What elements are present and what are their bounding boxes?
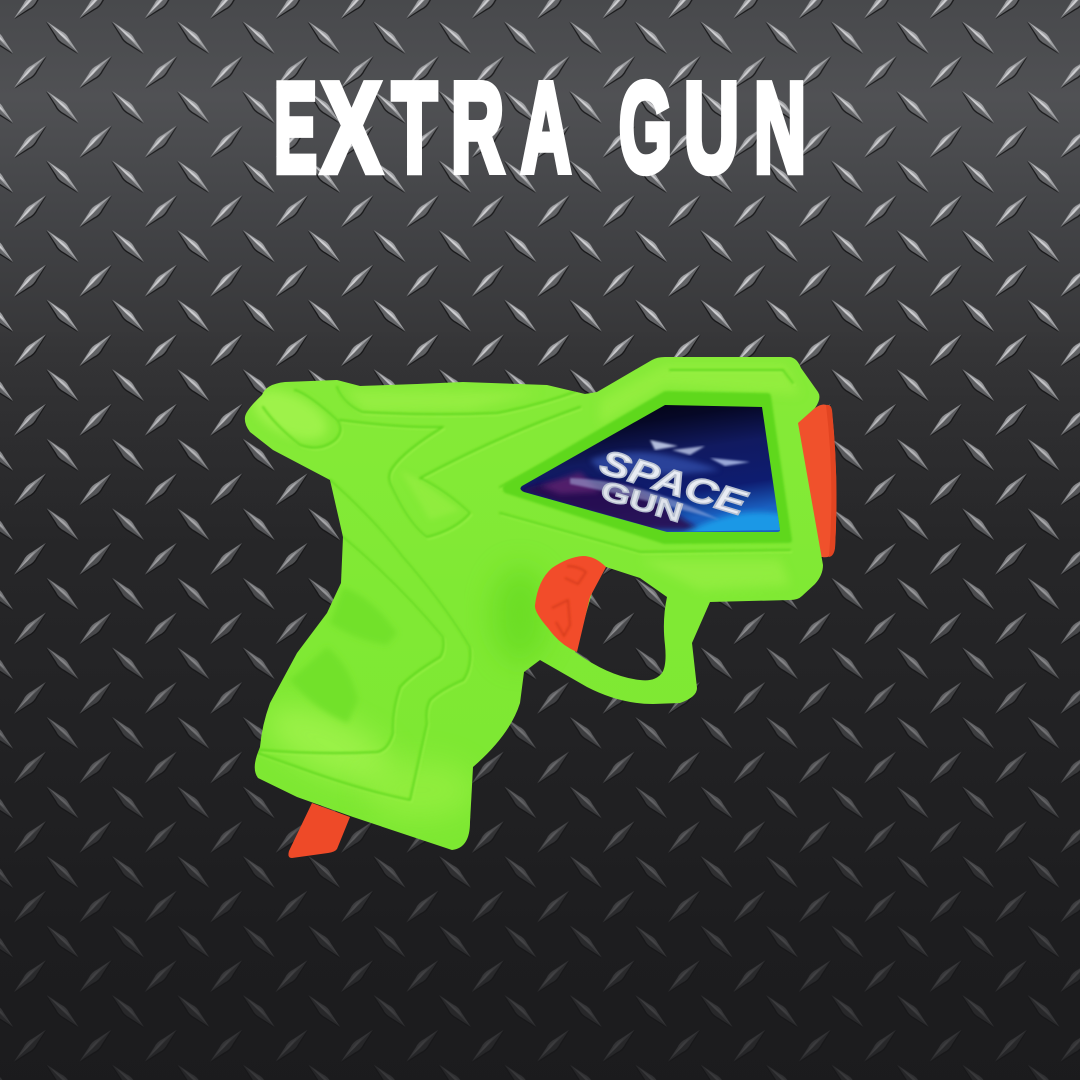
- green gun body: [245, 357, 823, 850]
- moulded body line highlights: [258, 372, 794, 802]
- title: A: [521, 56, 571, 198]
- window frame: [502, 391, 792, 544]
- moulded body lines: [257, 370, 793, 800]
- label text: SPACE: SPACE: [596, 442, 753, 524]
- title: N: [754, 56, 806, 198]
- icon: orange muzzle: [795, 404, 836, 557]
- icon: orange trigger: [535, 556, 606, 652]
- title: T: [392, 56, 437, 198]
- title: X: [322, 56, 381, 198]
- soft highlights and shading on the body: [245, 365, 800, 820]
- title: E: [274, 56, 317, 198]
- title: U: [684, 56, 739, 198]
- title: R: [451, 56, 504, 198]
- title: G: [619, 56, 672, 198]
- label artwork: nebula streaks: [520, 440, 784, 536]
- grip pads: [290, 587, 397, 723]
- panel: space gun label: [520, 405, 784, 536]
- title: [274, 56, 806, 198]
- label text: GUN: GUN: [597, 475, 686, 528]
- icon: orange firing pin: [288, 803, 350, 858]
- toy gun: [245, 357, 836, 858]
